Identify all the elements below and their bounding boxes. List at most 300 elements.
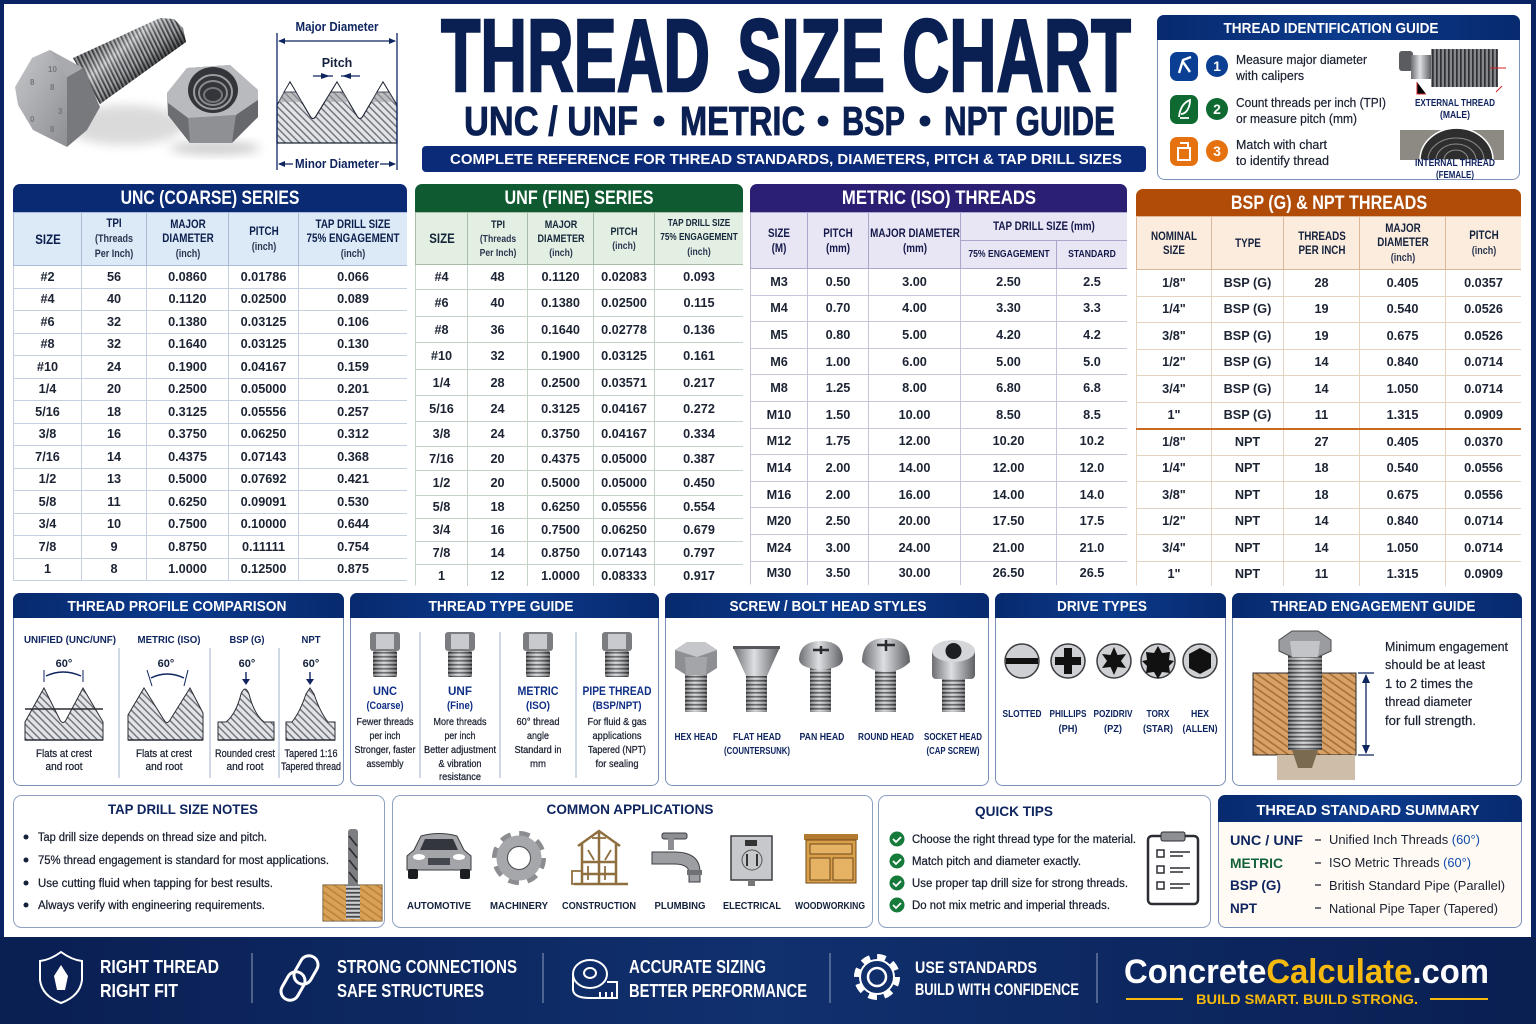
table: UNC coarse series: 3/4 <box>39 517 56 531</box>
table: UNC coarse series: 0.201 <box>337 382 369 396</box>
table: UNF fine series: 20 <box>490 476 505 490</box>
table: BSP and NPT threads: 0.0909 <box>1464 408 1503 422</box>
table: UNF fine series: 0.06250 <box>601 523 647 537</box>
arrow: engagement length <box>1358 673 1374 755</box>
footer message 3 <box>629 957 807 1001</box>
table: UNF fine series: 40 <box>490 296 505 310</box>
table: BSP and NPT threads: 0.0714 <box>1464 355 1503 369</box>
table: BSP and NPT threads: 1/8" <box>1162 276 1186 290</box>
table: UNF fine series: 0.797 <box>683 546 715 560</box>
panel: thread type guide: Tapered (NPT) <box>588 745 646 756</box>
panel: screw and bolt head styles: (COUNTERSUNK) <box>724 745 790 757</box>
table: UNC coarse series: MAJOR <box>170 217 205 231</box>
table: metric ISO threads: 12.00 <box>899 434 930 448</box>
table: UNF fine series: 7/16 <box>429 452 454 466</box>
table: UNF fine series: 1/2 <box>433 476 450 490</box>
icon: clipboard <box>1148 832 1198 904</box>
table: UNC coarse series: 18 <box>107 405 121 419</box>
panel: common applications: WOODWORKING <box>795 900 865 912</box>
table: metric ISO threads: 14.00 <box>993 488 1024 502</box>
footer message 4 <box>915 958 1079 999</box>
table: BSP and NPT threads: PER INCH <box>1298 243 1345 257</box>
panel: screw and bolt head styles: (CAP SCREW) <box>926 745 980 757</box>
table: BSP and NPT threads: 3/8" <box>1162 329 1186 343</box>
panel: thread profile comparison: BSP (G) <box>230 634 264 646</box>
table: UNC coarse series: 0.1900 <box>168 360 207 374</box>
table: UNF fine series: 1.0000 <box>541 568 580 582</box>
table: UNC coarse series: 0.09091 <box>241 495 286 509</box>
table: UNF fine series: 0.161 <box>683 349 715 363</box>
table: UNF fine series: 0.1640 <box>541 322 580 336</box>
table: BSP and NPT threads: 0.840 <box>1387 355 1418 369</box>
table: UNC coarse series: 20 <box>107 382 121 396</box>
table: metric ISO threads: 8.00 <box>902 381 927 395</box>
table: UNC coarse series: 0.5000 <box>168 472 207 486</box>
diagram: thread geometry: Major Diameter <box>296 20 379 34</box>
table: UNC coarse series: 0.1640 <box>168 337 207 351</box>
panel: thread type guide: per inch <box>444 731 476 742</box>
table: BSP and NPT threads: 0.540 <box>1387 461 1418 475</box>
table: BSP and NPT threads: BSP (G) <box>1224 302 1271 316</box>
panel: drive types: POZIDRIV <box>1094 708 1132 720</box>
table: UNC coarse series: 32 <box>107 315 121 329</box>
table: UNC coarse series: 7/16 <box>35 450 60 464</box>
table: UNF fine series: 0.05556 <box>601 500 647 514</box>
table: UNF fine series: 0.1380 <box>541 296 580 310</box>
panel: thread engagement guide: Minimum engagement <box>1385 640 1509 654</box>
panel: thread standard summary: Unified Inch Threads (60°) <box>1329 833 1480 847</box>
table: metric ISO threads: 2.50 <box>996 275 1021 289</box>
panel: drive types: SLOTTED <box>1002 708 1042 720</box>
table: UNF fine series: 0.387 <box>683 452 715 466</box>
table: UNF fine series: 0.136 <box>683 322 715 336</box>
panel: thread profile comparison <box>13 593 344 786</box>
table: UNC coarse series: #4 <box>40 292 55 306</box>
icon: car <box>407 834 471 879</box>
illustration: bolt and nut: 8 <box>50 83 55 92</box>
table: BSP and NPT threads: 0.0714 <box>1464 514 1503 528</box>
table: UNF fine series: #8 <box>434 322 449 336</box>
panel: thread profile comparison: Flats at crest <box>36 748 92 760</box>
icon: faucet <box>652 833 702 882</box>
panel: drive types: (ALLEN) <box>1182 723 1218 735</box>
subtitle: METRIC <box>680 98 805 144</box>
table: BSP and NPT threads: 0.0909 <box>1464 567 1503 581</box>
table: metric ISO threads: 6.00 <box>902 355 927 369</box>
table: UNF fine series: TPI <box>490 218 505 230</box>
table: UNC coarse series: 0.01786 <box>241 270 286 284</box>
table: UNC coarse series: SIZE <box>35 231 60 247</box>
subtitle <box>464 98 1115 144</box>
table: UNF fine series: 0.450 <box>683 476 715 490</box>
table: UNC coarse series: PITCH <box>249 224 278 238</box>
table: BSP and NPT threads: 19 <box>1314 302 1329 316</box>
panel: quick tips: Choose the right thread type for the material. <box>912 834 1136 846</box>
table: BSP and NPT threads: THREADS <box>1298 228 1345 242</box>
table: UNC coarse series: 0.6250 <box>168 495 207 509</box>
panel: thread profile comparison: 60° <box>56 658 72 670</box>
icon: electrical box <box>731 836 772 886</box>
table: metric ISO threads: 5.00 <box>996 355 1021 369</box>
table: metric ISO threads: M8 <box>770 381 788 395</box>
table: UNF fine series: 0.2500 <box>541 376 580 390</box>
table: UNC coarse series: 0.2500 <box>168 382 207 396</box>
panel: thread profile comparison: and root <box>46 761 82 773</box>
table: UNF fine series: 0.04167 <box>601 427 647 441</box>
panel: thread type guide: UNC <box>373 684 397 698</box>
table: UNF fine series: 16 <box>490 523 505 537</box>
table: BSP and NPT threads: 0.0357 <box>1464 276 1503 290</box>
table: UNC coarse series: 0.07143 <box>241 450 286 464</box>
table: UNF fine series: 5/8 <box>433 500 450 514</box>
table: UNC coarse series: (inch) <box>251 240 276 252</box>
image: internal thread <box>1400 128 1504 160</box>
panel: thread identification guide: INTERNAL THREAD <box>1415 158 1495 169</box>
table: BSP and NPT threads: 0.405 <box>1387 276 1418 290</box>
panel: thread standard summary: UNC / UNF <box>1230 832 1303 848</box>
table: UNF fine series: 0.02778 <box>601 322 647 336</box>
table: metric ISO threads: M12 <box>767 434 791 448</box>
table: BSP and NPT threads: BSP (G) <box>1224 276 1271 290</box>
table: BSP and NPT threads: BSP (G) & NPT THREADS <box>1230 193 1427 214</box>
table: metric ISO threads: 17.50 <box>993 514 1024 528</box>
panel: thread engagement guide: thread diameter <box>1385 695 1472 709</box>
table: UNF fine series: 18 <box>490 500 505 514</box>
table: BSP and NPT threads: 0.405 <box>1387 435 1418 449</box>
table: UNC coarse series: 10 <box>107 517 121 531</box>
panel: thread identification guide: to identify thread <box>1236 154 1329 168</box>
table: UNC coarse series: 0.130 <box>337 337 369 351</box>
table: UNF fine series: SIZE <box>429 230 454 246</box>
table: BSP and NPT threads: 0.0370 <box>1464 435 1503 449</box>
tagline banner <box>422 146 1146 172</box>
table: UNC coarse series: 0.3125 <box>168 405 207 419</box>
table: BSP and NPT threads: 0.0714 <box>1464 382 1503 396</box>
table: BSP and NPT threads: TYPE <box>1235 236 1260 250</box>
panel: thread standard summary: THREAD STANDARD SUMMARY <box>1256 802 1480 819</box>
table: UNF fine series: 0.02083 <box>601 270 647 284</box>
table: UNF fine series: 0.917 <box>683 568 715 582</box>
table: UNF fine series: 24 <box>490 402 505 416</box>
table: BSP and NPT threads: 1/2" <box>1162 355 1186 369</box>
table: UNC coarse series: 0.530 <box>337 495 369 509</box>
table: metric ISO threads: 21.0 <box>1080 541 1104 555</box>
table: UNF fine series: 75% ENGAGEMENT <box>660 232 738 243</box>
panel: common applications: AUTOMOTIVE <box>407 900 471 912</box>
panel: thread type guide: 60° thread <box>516 717 560 728</box>
table: metric ISO threads: TAP DRILL SIZE (mm) <box>993 219 1095 233</box>
table: UNC coarse series: 5/8 <box>39 495 56 509</box>
table: metric ISO threads: 0.80 <box>826 328 850 342</box>
table: BSP and NPT threads: 3/4" <box>1162 541 1186 555</box>
table: UNF fine series: 0.03125 <box>601 349 647 363</box>
table: UNC coarse series: 0.1120 <box>168 292 207 306</box>
panel: thread profile comparison: 60° <box>303 658 319 670</box>
table: UNC coarse series: 0.05000 <box>241 382 286 396</box>
panel: thread standard summary <box>1218 795 1522 928</box>
panel: thread standard summary: ISO Metric Threads (60°) <box>1329 856 1471 870</box>
table: UNC coarse series: TPI <box>106 216 122 230</box>
table: UNC coarse series: 0.089 <box>337 292 369 306</box>
table: metric ISO threads: 4.2 <box>1083 328 1101 342</box>
table: UNF fine series: 12 <box>490 568 505 582</box>
table: metric ISO threads: METRIC (ISO) THREADS <box>841 188 1036 209</box>
table: BSP and NPT threads: 1/8" <box>1162 435 1186 449</box>
table: UNF fine series: 0.8750 <box>541 546 580 560</box>
table: BSP and NPT threads: (inch) <box>1471 244 1496 256</box>
panel: thread standard summary: BSP (G) <box>1230 877 1281 893</box>
table: metric ISO threads: 14.00 <box>899 461 930 475</box>
table: UNF fine series: 0.5000 <box>541 476 580 490</box>
table: BSP and NPT threads: 0.675 <box>1387 329 1418 343</box>
table: BSP and NPT threads: 1/4" <box>1162 302 1186 316</box>
icon: hex head <box>675 642 717 712</box>
table: UNF fine series: 0.6250 <box>541 500 580 514</box>
table: UNF fine series: (inch) <box>549 246 572 258</box>
table: UNC coarse series: 0.04167 <box>241 360 286 374</box>
table: UNF fine series: 0.07143 <box>601 546 647 560</box>
illustration: bolt and nut: 8 <box>50 125 55 134</box>
table: BSP and NPT threads: NPT <box>1235 514 1260 528</box>
panel: thread profile comparison: METRIC (ISO) <box>138 634 200 646</box>
footer message 2 <box>337 957 517 1001</box>
table: BSP and NPT threads: 19 <box>1314 329 1329 343</box>
table: BSP and NPT threads: 0.540 <box>1387 302 1418 316</box>
table: UNC coarse series: 16 <box>107 427 121 441</box>
table: UNC coarse series: #2 <box>40 270 55 284</box>
table: metric ISO threads: 26.50 <box>993 566 1024 580</box>
panel: thread identification guide: 2 <box>1213 101 1221 117</box>
table: UNC coarse series: 0.11111 <box>242 540 285 554</box>
panel: screw and bolt head styles: ROUND HEAD <box>858 731 914 743</box>
table: UNC coarse series: 0.0860 <box>168 270 207 284</box>
table: UNF fine series: UNF (FINE) SERIES <box>505 188 653 209</box>
panel: thread type guide: angle <box>527 731 549 742</box>
panel: drive types: TORX <box>1146 708 1170 720</box>
table: metric ISO threads: 14.0 <box>1080 488 1104 502</box>
table: metric ISO threads: 1.50 <box>826 408 850 422</box>
panel: thread identification guide: (MALE) <box>1440 110 1470 121</box>
panel: quick tips: Match pitch and diameter exactly. <box>912 856 1081 868</box>
panel: tap drill size notes: Use cutting fluid when tapping for best results. <box>38 878 273 890</box>
panel: thread identification guide: Measure major diameter <box>1236 53 1367 67</box>
table: metric ISO threads: 0.50 <box>826 275 850 289</box>
table: metric ISO threads: STANDARD <box>1068 248 1116 260</box>
illustration: bolt and nut: 10 <box>48 65 57 74</box>
table: UNF fine series: #10 <box>431 349 452 363</box>
table: metric ISO threads: 5.00 <box>902 328 927 342</box>
table: metric ISO threads: M10 <box>767 408 791 422</box>
panel: thread type guide: Stronger, faster <box>354 745 416 756</box>
table: metric ISO threads: 17.5 <box>1080 514 1104 528</box>
panel: thread type guide: (Coarse) <box>366 700 404 712</box>
table: metric ISO threads: 10.20 <box>993 434 1024 448</box>
table: metric ISO threads: 8.5 <box>1083 408 1101 422</box>
table: BSP and NPT threads: 0.0714 <box>1464 541 1503 555</box>
panel: thread engagement guide: 1 to 2 times the <box>1385 677 1473 691</box>
panel: thread profile comparison: 60° <box>158 658 174 670</box>
table: metric ISO threads: M14 <box>767 461 791 475</box>
table: UNC coarse series: 1 <box>44 562 51 576</box>
panel: thread identification guide: EXTERNAL THREAD <box>1415 98 1495 109</box>
footer message 2: SAFE STRUCTURES <box>337 981 484 1001</box>
table: UNC coarse series: 1/2 <box>39 472 56 486</box>
panel: thread profile comparison: and root <box>226 761 264 773</box>
table: BSP and NPT threads: 14 <box>1314 541 1329 555</box>
table: metric ISO threads: 16.00 <box>899 488 930 502</box>
panel: thread engagement guide <box>1232 593 1522 786</box>
table: UNF fine series: 0.05000 <box>601 476 647 490</box>
panel: thread standard summary: National Pipe Taper (Tapered) <box>1329 902 1498 916</box>
table: UNC coarse series: 0.644 <box>337 517 369 531</box>
footer band <box>0 937 1536 1024</box>
table: metric ISO threads: 30.00 <box>899 566 930 580</box>
panel: thread type guide: applications <box>592 731 642 742</box>
table: metric ISO threads: 10.2 <box>1080 434 1104 448</box>
icon: socket head <box>932 640 975 712</box>
table: UNC coarse series: 7/8 <box>39 540 56 554</box>
table: metric ISO threads: 3.00 <box>826 541 850 555</box>
panel: thread identification guide: Match with chart <box>1236 138 1328 152</box>
table: UNC coarse series: 0.03125 <box>241 337 286 351</box>
table: UNC coarse series: #10 <box>37 360 58 374</box>
table: BSP and NPT threads: 14 <box>1314 355 1329 369</box>
table: BSP and NPT threads: 0.0526 <box>1464 302 1503 316</box>
diagram: thread geometry: Pitch <box>322 56 352 70</box>
table: metric ISO threads: M6 <box>770 355 788 369</box>
panel: thread profile comparison: Flats at crest <box>136 748 192 760</box>
icon: gear <box>496 835 542 881</box>
panel: common applications: MACHINERY <box>490 900 548 912</box>
table: UNF fine series: 0.3750 <box>541 427 580 441</box>
panel: thread engagement guide: for full strength. <box>1385 714 1476 728</box>
panel: thread type guide: METRIC <box>518 684 559 698</box>
panel: tap drill size notes: 75% thread engagement is standard for most applications. <box>38 855 329 867</box>
panel: thread engagement guide: THREAD ENGAGEMENT GUIDE <box>1270 598 1476 615</box>
panel: thread profile comparison: 60° <box>239 658 255 670</box>
table: metric ISO threads: SIZE <box>768 226 790 240</box>
icon: chain link <box>278 953 321 1003</box>
table: BSP and NPT threads: 18 <box>1314 488 1329 502</box>
panel: thread type guide: mm <box>530 759 546 770</box>
table: UNF fine series: 3/8 <box>433 427 450 441</box>
panel: common applications: PLUMBING <box>654 900 706 912</box>
table: UNC coarse series: 0.875 <box>337 562 369 576</box>
diagram: thread geometry: Minor Diameter <box>295 157 379 171</box>
panel: screw and bolt head styles: HEX HEAD <box>674 731 718 743</box>
table: UNF fine series: 0.217 <box>683 376 715 390</box>
table: BSP and NPT threads: BSP (G) <box>1224 382 1271 396</box>
table: UNC coarse series: 0.06250 <box>241 427 286 441</box>
table: BSP and NPT threads: 14 <box>1314 382 1329 396</box>
table: BSP and NPT threads: NPT <box>1235 488 1260 502</box>
panel: common applications: COMMON APPLICATIONS <box>546 801 714 817</box>
table: UNC coarse series: 1/4 <box>39 382 56 396</box>
table: UNF fine series: 0.7500 <box>541 523 580 537</box>
panel: drive types: DRIVE TYPES <box>1057 598 1147 615</box>
table: BSP and NPT threads: DIAMETER <box>1377 235 1428 249</box>
table: metric ISO threads: 1.00 <box>826 355 850 369</box>
table: BSP and NPT threads: MAJOR <box>1385 221 1420 235</box>
table: UNF fine series: 7/8 <box>433 546 450 560</box>
panel: drive types: (STAR) <box>1143 723 1173 735</box>
panel: quick tips: Do not mix metric and imperial threads. <box>912 900 1110 912</box>
icon: cabinet <box>804 834 858 883</box>
panel: common applications <box>392 796 872 928</box>
table: UNF fine series: TAP DRILL SIZE <box>668 218 730 229</box>
table: UNC coarse series: 14 <box>107 450 121 464</box>
table: metric ISO threads: M30 <box>767 566 791 580</box>
table: UNF fine series: 0.4375 <box>541 452 580 466</box>
table: UNF fine series: 20 <box>490 452 505 466</box>
table: metric ISO threads: 3.3 <box>1083 301 1101 315</box>
panel: thread type guide: Better adjustment <box>424 745 496 756</box>
title: CHART <box>902 0 1131 113</box>
panel: tap drill size notes <box>14 796 384 928</box>
profile: unified <box>25 670 103 740</box>
panel: tap drill size notes: Always verify with engineering requirements. <box>38 900 265 912</box>
table: UNF fine series: 0.04167 <box>601 402 647 416</box>
table: UNC coarse series: 11 <box>107 495 121 509</box>
table: BSP and NPT threads: 1/2" <box>1162 514 1186 528</box>
table: UNF fine series: 3/4 <box>433 523 450 537</box>
table: UNC coarse series: (inch) <box>341 248 365 260</box>
panel: quick tips <box>878 796 1210 928</box>
table: UNC coarse series: 0.10000 <box>241 517 286 531</box>
panel: thread profile comparison: Tapered thread <box>281 761 341 773</box>
table: metric ISO threads: M5 <box>770 328 788 342</box>
table: BSP and NPT threads: BSP (G) <box>1224 408 1271 422</box>
table: BSP and NPT threads: 0.675 <box>1387 488 1418 502</box>
table: metric ISO threads: (mm) <box>902 240 927 254</box>
table: metric ISO threads: M3 <box>770 275 788 289</box>
panel: thread identification guide: THREAD IDENTIFICATION GUIDE <box>1224 20 1438 37</box>
table: metric ISO threads: PITCH <box>823 226 853 240</box>
table: metric ISO threads: 12.0 <box>1080 461 1104 475</box>
table: UNF fine series: 0.272 <box>683 402 715 416</box>
illustration: bolt and nut: 0 <box>30 115 35 124</box>
table: BSP and NPT threads: 11 <box>1315 567 1328 581</box>
panel: thread identification guide: (FEMALE) <box>1436 170 1474 181</box>
table: UNF fine series: 0.1120 <box>541 270 580 284</box>
table: metric ISO threads: 12.00 <box>993 461 1024 475</box>
table: UNF fine series: (Threads <box>479 232 516 244</box>
table: BSP and NPT threads: 28 <box>1314 276 1329 290</box>
table: UNC coarse series: 1.0000 <box>168 562 207 576</box>
table: metric ISO threads: 1.25 <box>826 381 850 395</box>
table: UNC coarse series: #8 <box>40 337 55 351</box>
table: metric ISO threads: 1.75 <box>826 434 850 448</box>
panel: thread identification guide: 3 <box>1213 143 1221 159</box>
panel: thread type guide: UNF <box>448 684 472 698</box>
table: UNC coarse series: 0.12500 <box>241 562 286 576</box>
table: metric ISO threads: M4 <box>770 301 788 315</box>
illustration: bolt in wood <box>1253 631 1356 780</box>
panel: thread identification guide: 1 <box>1213 58 1221 74</box>
panel: thread identification guide: Count threads per inch (TPI) <box>1236 96 1386 110</box>
table: BSP and NPT threads: 3/4" <box>1162 382 1186 396</box>
table: BSP and NPT threads <box>1136 189 1521 586</box>
table: metric ISO threads: 0.70 <box>826 301 850 315</box>
icon: tape measure <box>573 960 617 998</box>
icon: tap drill in wood <box>323 829 382 921</box>
table: UNF fine series: 0.554 <box>683 500 715 514</box>
table: metric ISO threads: (mm) <box>826 240 850 254</box>
table: UNC coarse series: DIAMETER <box>162 231 213 245</box>
profile: metric <box>128 670 203 740</box>
table: BSP and NPT threads: 1" <box>1167 567 1181 581</box>
panel: thread type guide: per inch <box>370 731 400 742</box>
